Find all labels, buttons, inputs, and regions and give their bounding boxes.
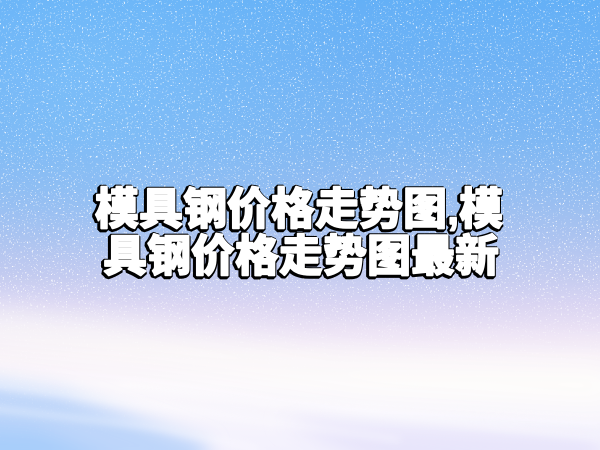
bright diagonal band [0,312,600,402]
title: two-line white heading with black outline: 具钢价格走势图最新 [103,232,499,281]
title: two-line white heading with black outline: 具钢价格走势图最新 [102,233,498,282]
lower blue wedge [0,378,600,450]
title: two-line white heading with black outline: 模具钢价格走势图,模 [95,185,503,234]
title: two-line white heading with black outline [94,185,503,282]
ripple streaks [0,384,600,450]
title: two-line white heading with black outline: 模具钢价格走势图,模 [94,186,502,235]
